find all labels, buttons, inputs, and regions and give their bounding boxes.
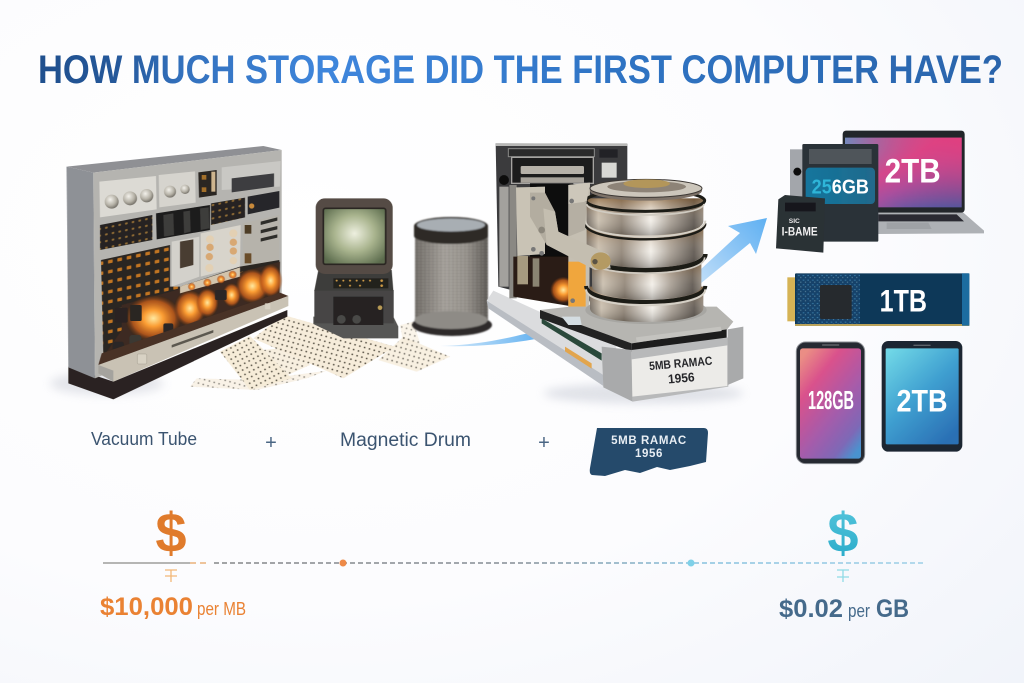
laptop 2TB [843, 131, 984, 234]
badge: 5MB RAMAC 1956: 1956 [635, 448, 663, 460]
illustration: vacuum tube computer, terminal and punched cards [50, 146, 450, 399]
top plate [540, 296, 733, 352]
disk stack [585, 179, 705, 322]
front label plate: 1956 [667, 370, 695, 386]
plus sign: + [265, 432, 277, 454]
illustration: RAMAC disk drive [487, 143, 743, 403]
arrow: swoosh into RAMAC [440, 330, 541, 346]
plus sign: + [538, 432, 550, 454]
icon: blue dollar: $ [827, 501, 859, 564]
price: $10,000 per MB: $10,000 [100, 593, 193, 621]
memory card 256GB [790, 144, 878, 242]
knob panels [99, 161, 281, 217]
marker: blue dot [688, 560, 694, 566]
phone 128GB [796, 342, 865, 464]
badge: 5MB RAMAC 1956 [590, 428, 708, 476]
arrow: to modern devices [700, 218, 767, 284]
front label plate: 5MB RAMAC [648, 354, 713, 373]
SSD 1TB [787, 273, 969, 326]
price: $0.02 per GB: $0.02 [779, 595, 843, 623]
modern devices [776, 131, 984, 464]
label: Vacuum Tube: Vacuum Tube [91, 429, 197, 449]
marker: orange dot [340, 560, 346, 566]
laptop 2TB: 2TB [885, 152, 941, 190]
chip [776, 195, 825, 253]
badge: 5MB RAMAC 1956: 5MB RAMAC [611, 435, 687, 447]
glowing vacuum tube section [101, 245, 283, 357]
phone 128GB: 128GB [808, 385, 854, 415]
tablet 2TB [882, 341, 962, 452]
price: $0.02 per GB: GB [876, 595, 909, 623]
label: Magnetic Drum: Magnetic Drum [340, 430, 471, 451]
price: $10,000 per MB: per MB [197, 599, 246, 619]
price: $0.02 per GB: per [848, 601, 870, 621]
rear cabinet [496, 143, 627, 317]
slide rail [487, 291, 617, 386]
chip: I-BAME [782, 225, 818, 239]
timeline [103, 560, 925, 566]
chip: SIC [789, 218, 800, 225]
tablet 2TB: 2TB [896, 384, 947, 419]
tick: blue [837, 570, 849, 582]
switch and tube rows [100, 191, 279, 287]
memory card 256GB: 256GB [812, 175, 869, 198]
SSD 1TB: 1TB [880, 284, 927, 319]
front ledge [98, 293, 288, 382]
computer terminal [313, 198, 398, 338]
front label plate [602, 327, 743, 402]
computer cabinet [67, 146, 288, 399]
actuator arm [516, 183, 611, 325]
magnetic drum [412, 217, 492, 336]
icon: orange dollar: $ [155, 501, 187, 564]
punched cards [190, 315, 450, 390]
tick: orange [165, 570, 177, 582]
